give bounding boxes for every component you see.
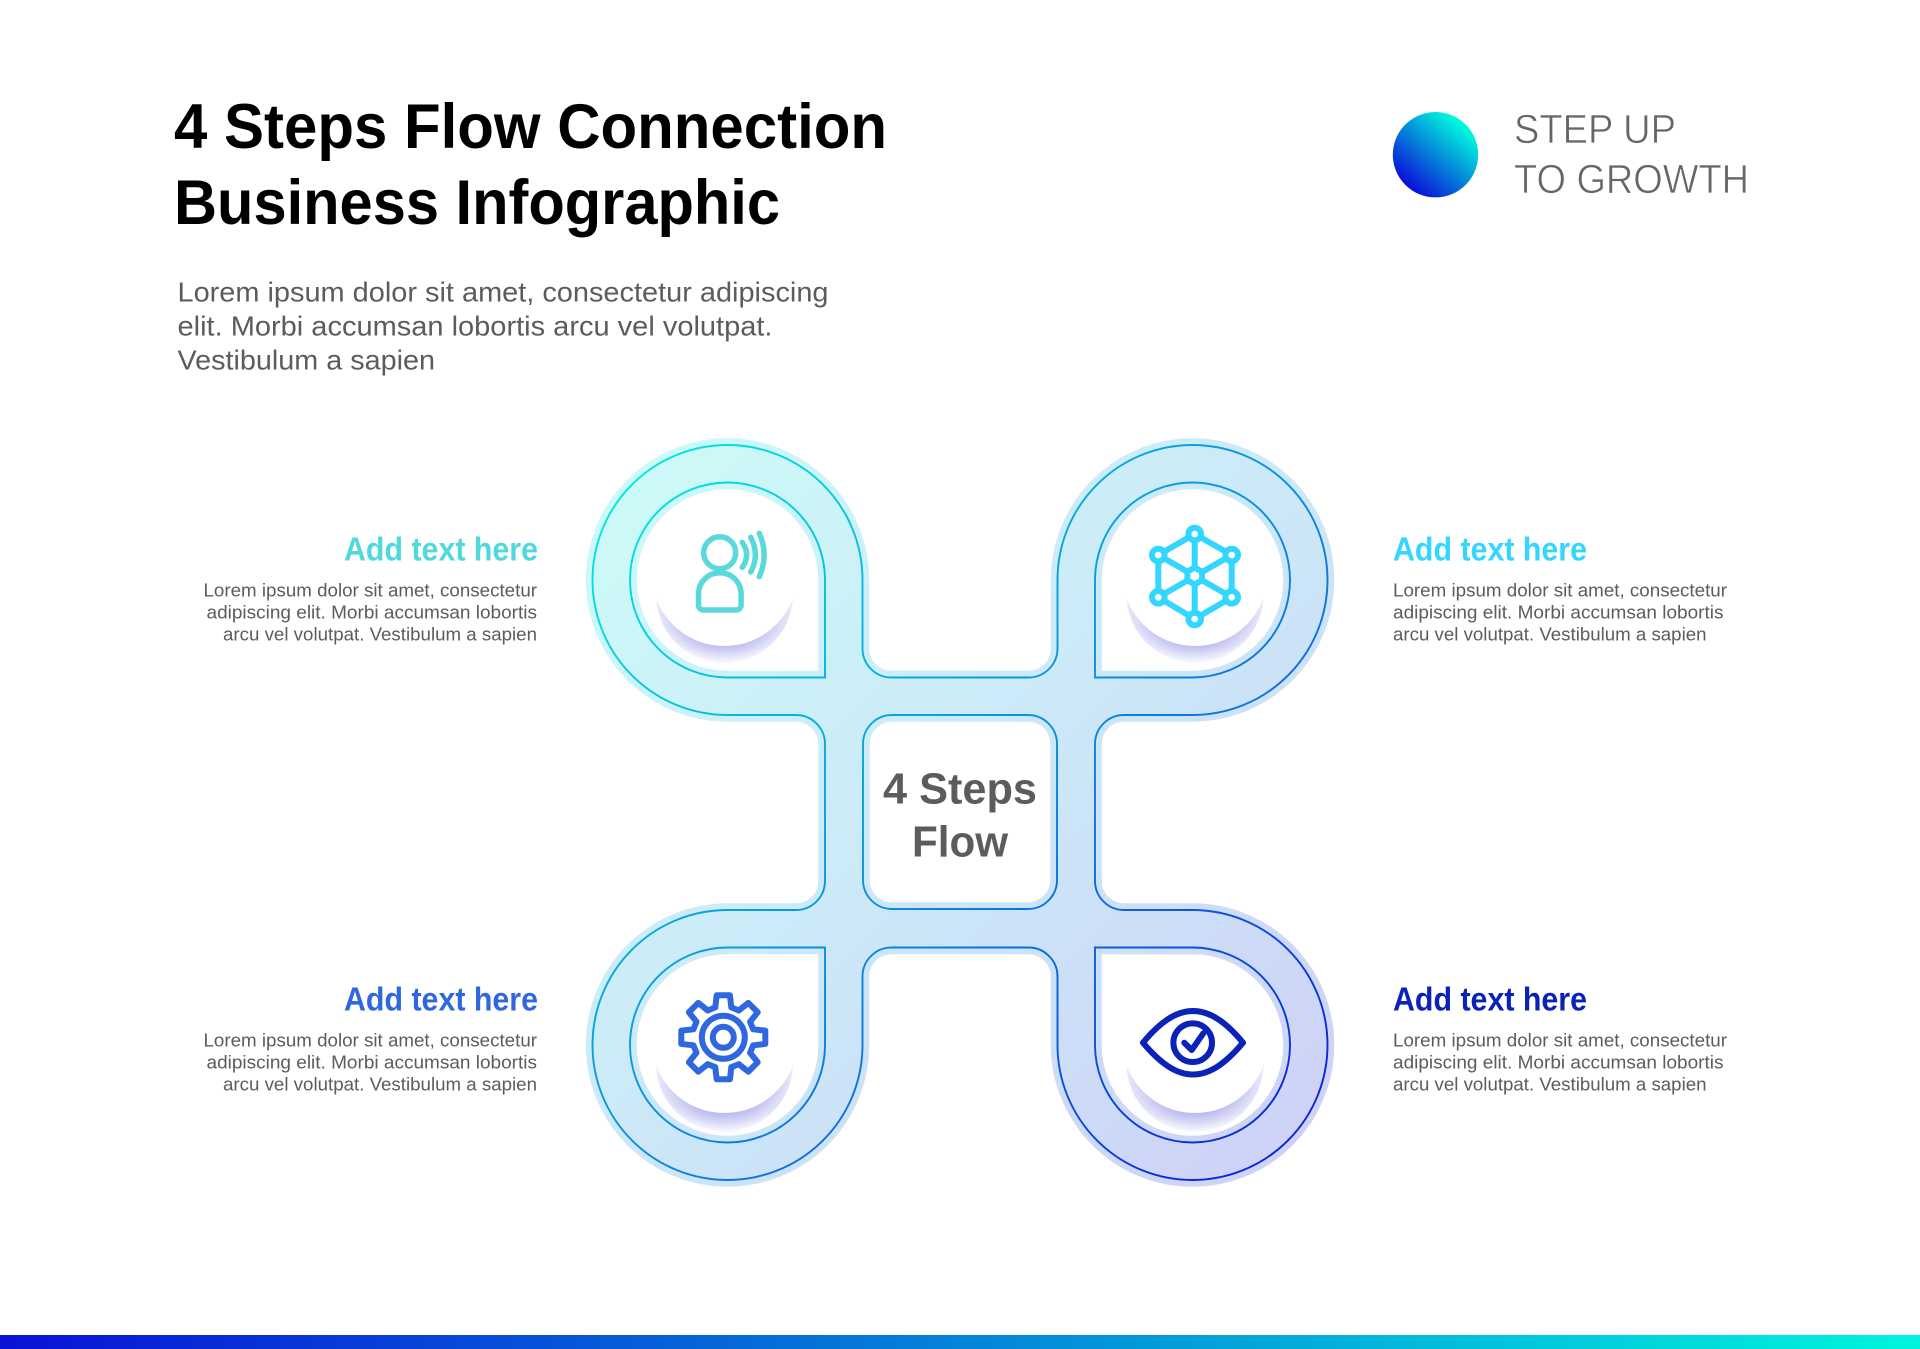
title: 4 Steps Flow Connection: [174, 92, 887, 162]
title: [174, 92, 887, 238]
heading: bottom right: Add text here: [1393, 980, 1587, 1018]
center label: 4 Steps: [883, 764, 1037, 814]
body: bottom left: [204, 1030, 537, 1094]
body: bottom right: arcu vel volutpat. Vestibulum a sapien: [1393, 1074, 1706, 1094]
flow diagram: [592, 445, 1328, 1180]
center label: Flow: [912, 818, 1009, 866]
intro paragraph: Lorem ipsum dolor sit amet, consectetur adipiscing: [178, 276, 828, 308]
icon: person speaking: [698, 533, 764, 610]
body: bottom left: Lorem ipsum dolor sit amet, consectetur: [204, 1030, 537, 1050]
icon: gradient circle: [1393, 112, 1478, 197]
drop shadow: top left: [656, 599, 793, 662]
connected flow band: [592, 445, 1328, 1180]
text block: bottom left step: [204, 980, 538, 1094]
logo: gradient circle with tagline: [1393, 106, 1749, 202]
intro paragraph: Vestibulum a sapien: [178, 344, 435, 376]
body: top right: Lorem ipsum dolor sit amet, consectetur: [1393, 580, 1727, 600]
body: top right: adipiscing elit. Morbi accumsan lobortis: [1393, 602, 1724, 622]
icon: eye with check: [1143, 1011, 1243, 1074]
text block: top left step: [204, 530, 538, 644]
body: top left: arcu vel volutpat. Vestibulum a sapien: [223, 624, 537, 644]
heading: bottom left: Add text here: [344, 980, 538, 1018]
drop shadow: bottom left: [656, 1066, 793, 1131]
gradient outline: [592, 445, 1328, 1180]
body: top right: arcu vel volutpat. Vestibulum a sapien: [1393, 624, 1706, 644]
body: bottom right: [1393, 1030, 1727, 1094]
body: top left: Lorem ipsum dolor sit amet, consectetur: [204, 580, 537, 600]
icon: hexagon network: [1152, 528, 1238, 625]
bottom gradient bar: [0, 1335, 1920, 1349]
title: Business Infographic: [174, 168, 780, 238]
tagline: [1514, 106, 1749, 202]
center label: [883, 764, 1037, 866]
body: bottom left: arcu vel volutpat. Vestibulum a sapien: [223, 1074, 537, 1094]
heading: top right: Add text here: [1393, 530, 1587, 568]
tagline: STEP UP: [1514, 106, 1676, 152]
text block: top right step: [1393, 530, 1727, 644]
intro paragraph: [178, 276, 828, 376]
icon: gear: [681, 995, 765, 1079]
body: bottom right: adipiscing elit. Morbi accumsan lobortis: [1393, 1052, 1724, 1072]
text block: bottom right step: [1393, 980, 1727, 1094]
drop shadow: top right: [1126, 599, 1264, 662]
body: top right: [1393, 580, 1727, 644]
body: top left: adipiscing elit. Morbi accumsan lobortis: [206, 602, 537, 622]
heading: top left: Add text here: [344, 530, 538, 568]
body: top left: [204, 580, 537, 644]
body: bottom right: Lorem ipsum dolor sit amet, consectetur: [1393, 1030, 1727, 1050]
tagline: TO GROWTH: [1514, 156, 1749, 202]
body: bottom left: adipiscing elit. Morbi accumsan lobortis: [206, 1052, 537, 1072]
intro paragraph: elit. Morbi accumsan lobortis arcu vel volutpat.: [178, 310, 772, 342]
drop shadow: bottom right: [1126, 1066, 1264, 1131]
